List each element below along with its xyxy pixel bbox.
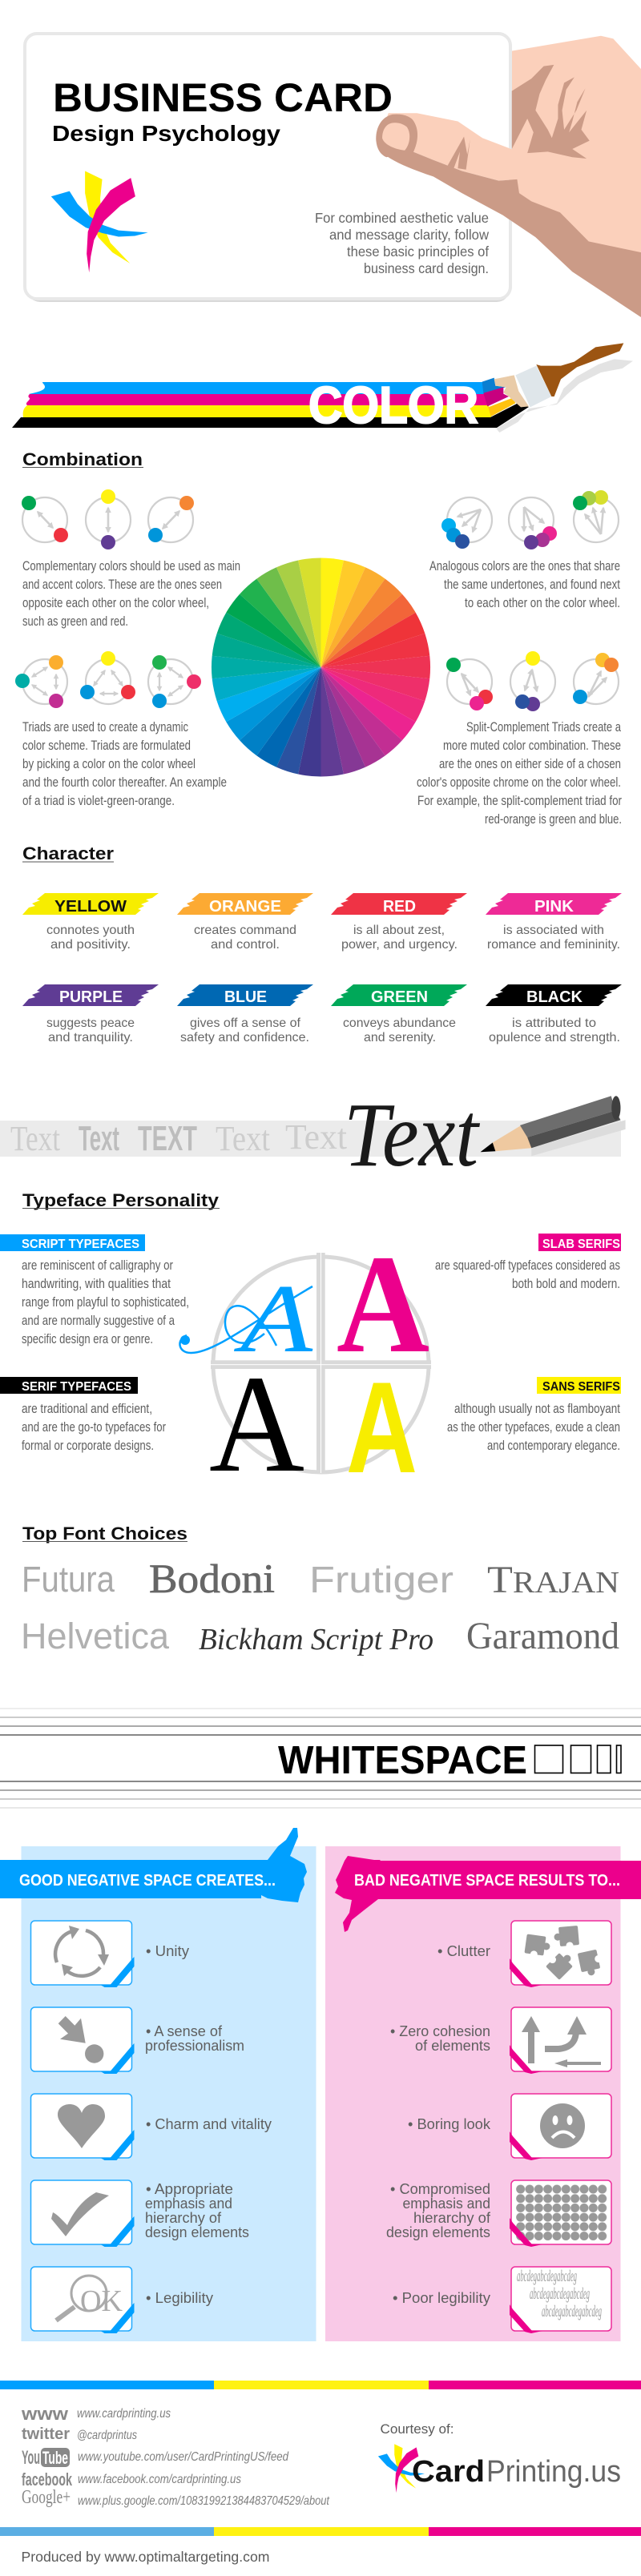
item: professionalism — [30, 2007, 244, 2074]
panel: good negative space — [0, 1828, 316, 2341]
www: www.cardprinting.us — [77, 2407, 171, 2421]
item: zero cohesion: of elements — [415, 2037, 490, 2054]
text: script typefaces — [22, 1258, 189, 1346]
label: slab serifs: SLAB SERIFS — [542, 1238, 620, 1251]
item: zero cohesion — [390, 2007, 611, 2074]
letter: script A: A — [234, 1265, 313, 1373]
google plus: Google+ — [22, 2487, 71, 2508]
twitter: twitter — [22, 2425, 70, 2443]
footer: social links — [21, 2404, 329, 2508]
letter: slab A: A — [337, 1226, 429, 1383]
www: www — [21, 2404, 69, 2424]
label: serif typefaces — [0, 1377, 138, 1394]
label: script typefaces — [0, 1234, 145, 1251]
youtube: www.youtube.com/user/CardPrintingUS/feed — [78, 2450, 289, 2464]
heading: WHITESPACE: WHITESPACE — [278, 1739, 527, 1782]
intro text — [315, 210, 489, 276]
twitter: @cardprintus — [77, 2429, 137, 2442]
letter: sans A: A — [346, 1355, 417, 1500]
logo: CardPrinting.us: Printing.us — [486, 2455, 621, 2489]
panel: blue — [177, 984, 313, 1044]
panel: red: RED — [383, 897, 416, 916]
panel: pink: is associated with — [503, 924, 604, 937]
google plus: www.plus.google.com/108319921384483704529/about — [78, 2494, 329, 2508]
diagram: four typeface quadrants — [179, 1226, 431, 1501]
item: compromised hierarchy: hierarchy of — [413, 2209, 491, 2226]
panel: orange: and control. — [211, 938, 280, 952]
item: clutter — [437, 1921, 611, 1987]
sample words: Text — [285, 1117, 347, 1157]
card — [25, 34, 510, 302]
facebook — [22, 2469, 241, 2489]
panel: yellow: YELLOW — [54, 897, 127, 916]
panel: red: power, and urgency. — [341, 938, 458, 952]
panel: green: conveys abundance — [343, 1016, 456, 1030]
illustration: pencil — [480, 1096, 626, 1156]
illustration: paint brush — [482, 343, 633, 433]
item: compromised hierarchy: • Compromised — [390, 2180, 490, 2197]
sample words — [10, 1117, 347, 1158]
panel: black: opulence and strength. — [489, 1031, 620, 1044]
twitter — [22, 2425, 137, 2443]
item: clutter: • Clutter — [437, 1942, 490, 1959]
diagrams: triad wheels — [15, 651, 201, 708]
panel: purple — [22, 984, 159, 1044]
heading: COLOR: COLOR — [308, 376, 478, 434]
intro text: and message clarity, follow — [329, 227, 489, 243]
facebook: facebook — [22, 2469, 72, 2489]
label: serif typefaces: SERIF TYPEFACES — [22, 1380, 131, 1394]
diagrams: analogous wheels — [441, 490, 619, 549]
panel: orange: creates command — [194, 924, 296, 937]
text: triads: of a triad is violet-green-orange. — [22, 793, 175, 808]
banner with thumbs up: GOOD NEGATIVE SPACE CREATES... — [19, 1872, 276, 1890]
panel: pink: PINK — [534, 897, 574, 916]
panel: font samples: Frutiger — [309, 1559, 454, 1600]
text: slab serifs — [435, 1258, 620, 1291]
panel: yellow: connotes youth — [46, 924, 135, 937]
facebook: www.facebook.com/cardprinting.us — [78, 2473, 241, 2486]
item: legibility: • Legibility — [146, 2289, 214, 2306]
text: analogous — [429, 558, 620, 610]
panel: orange — [177, 893, 313, 952]
item: compromised hierarchy — [386, 2180, 611, 2247]
text: serif typefaces — [22, 1401, 166, 1453]
google plus — [22, 2487, 329, 2508]
item: professionalism: professionalism — [145, 2037, 244, 2054]
item: compromised hierarchy: design elements — [386, 2224, 490, 2240]
item: boring look — [408, 2094, 611, 2160]
icon: CMYK logo — [51, 171, 148, 272]
footer stripe top — [0, 2381, 641, 2389]
item: hierarchy: design elements — [145, 2224, 249, 2240]
label: slab serifs — [538, 1234, 621, 1251]
quadrant ring — [211, 1253, 431, 1473]
label: script typefaces: SCRIPT TYPEFACES — [22, 1238, 139, 1251]
heading: Typeface Personality: Typeface Personality — [22, 1190, 220, 1210]
panel: blue: BLUE — [224, 988, 267, 1006]
diagrams: split-complement wheels — [446, 651, 619, 711]
banner with thumbs up — [0, 1828, 307, 1902]
text: complementary: and accent colors. These are the ones seen — [22, 577, 222, 592]
sample words: Text — [216, 1119, 270, 1158]
panel: font samples: Garamond — [466, 1615, 619, 1657]
panel: purple: suggests peace — [46, 1016, 135, 1030]
text: serif typefaces: are traditional and efficient, — [22, 1401, 152, 1416]
www — [21, 2404, 171, 2424]
panel: green: and serenity. — [364, 1031, 436, 1044]
item: boring look: • Boring look — [408, 2115, 491, 2132]
item: zero cohesion: • Zero cohesion — [390, 2023, 490, 2039]
panel: yellow: and positivity. — [50, 938, 131, 952]
chart: color wheel — [212, 557, 430, 777]
panel: font samples: Helvetica — [21, 1616, 170, 1656]
panel: font samples — [21, 1557, 619, 1657]
panel: red — [331, 893, 467, 952]
item: charm: • Charm and vitality — [146, 2115, 272, 2132]
letter: serif A: A — [209, 1346, 304, 1501]
diagrams: complementary wheels — [22, 489, 194, 549]
youtube — [22, 2447, 289, 2469]
footer stripe bottom — [0, 2527, 641, 2536]
intro text: For combined aesthetic value — [315, 210, 489, 226]
panel: purple: and tranquility. — [48, 1031, 133, 1044]
panel: orange: ORANGE — [209, 897, 281, 916]
panel: black: is attributed to — [512, 1016, 596, 1030]
text: sans serifs — [447, 1401, 620, 1453]
panel: red: is all about zest, — [353, 924, 445, 937]
illustration: thumb and palm over card — [376, 65, 641, 317]
panel: font samples: Bickham Script Pro — [199, 1623, 433, 1656]
panel: pink: romance and femininity. — [487, 938, 620, 952]
panel: bad negative space — [325, 1846, 641, 2341]
sample words: Text — [10, 1119, 60, 1158]
text: complementary: opposite each other on the color wheel, — [22, 595, 209, 610]
illustration: hand back and fingers behind card — [511, 36, 641, 254]
item: professionalism: • A sense of — [146, 2023, 223, 2039]
item: unity — [30, 1921, 190, 1987]
text: complementary — [22, 558, 240, 629]
text: triads: color scheme. Triads are formulated — [22, 738, 191, 753]
item: poor legibility: • Poor legibility — [393, 2289, 491, 2306]
label: sans serifs: SANS SERIFS — [542, 1380, 620, 1394]
subtitle: Design Psychology — [52, 121, 280, 146]
banner with thumbs down — [335, 1856, 641, 1932]
panel: purple: PURPLE — [59, 988, 123, 1006]
panel: yellow — [22, 893, 159, 952]
panel: font samples: TRAJAN — [487, 1559, 619, 1601]
banner strip — [0, 1121, 621, 1157]
text: script typefaces: and are normally suggestive of a — [22, 1313, 175, 1328]
item: hierarchy: hierarchy of — [145, 2209, 222, 2226]
logo: CardPrinting.us: Card — [412, 2455, 485, 2489]
text: triads: Triads are used to create a dynamic — [22, 719, 188, 735]
panel: text banner — [0, 1084, 626, 1185]
text: script typefaces: handwriting, with qualities that — [22, 1276, 171, 1291]
icon: shrinking boxes — [535, 1745, 621, 1773]
text: complementary: such as green and red. — [22, 614, 128, 629]
intro text: business card design. — [364, 260, 489, 276]
panel: black: BLACK — [526, 988, 583, 1006]
panel: green: GREEN — [371, 988, 428, 1006]
panel: font samples: Futura — [22, 1559, 115, 1600]
intro text: these basic principles of — [347, 244, 489, 260]
credit: Produced by www.optimaltargeting.com — [21, 2549, 269, 2565]
text: serif typefaces: and are the go-to typefaces for — [22, 1419, 166, 1435]
item: legibility: OK — [80, 2284, 123, 2318]
courtesy label: Courtesy of: — [380, 2421, 454, 2437]
item: poor legibility — [393, 2267, 611, 2333]
panel: black — [486, 984, 622, 1044]
title: BUSINESS CARD — [53, 75, 393, 120]
heading: Character: Character — [22, 843, 114, 863]
item: hierarchy: • Appropriate — [146, 2180, 233, 2197]
panel: color banner — [12, 343, 633, 434]
text: split-complement — [417, 719, 622, 827]
item: hierarchy: emphasis and — [145, 2195, 232, 2212]
sample words: TEXT — [138, 1119, 197, 1158]
text: triads: and the fourth color thereafter. An example — [22, 775, 227, 790]
text: triads: by picking a color on the color wheel — [22, 756, 196, 771]
text: complementary: Complementary colors should be used as main — [22, 558, 240, 574]
heading: Top Font Choices: Top Font Choices — [22, 1523, 187, 1544]
item: charm — [30, 2094, 272, 2160]
text: triads — [22, 719, 227, 808]
panel: hero business card — [25, 34, 641, 317]
text: serif typefaces: formal or corporate designs. — [22, 1438, 154, 1453]
youtube: You — [22, 2447, 40, 2469]
panel: green — [331, 984, 467, 1044]
logo: CardPrinting.us — [378, 2444, 621, 2493]
heading: Combination: Combination — [22, 449, 143, 469]
text: script typefaces: are reminiscent of calligraphy or — [22, 1258, 173, 1273]
panel: font samples: Bodoni — [149, 1557, 275, 1602]
item: hierarchy — [30, 2180, 249, 2247]
sample words: Text — [79, 1119, 119, 1158]
panel: pink — [486, 893, 622, 952]
item: legibility — [30, 2267, 214, 2333]
text: script typefaces: specific design era or genre. — [22, 1331, 153, 1346]
panel: blue: gives off a sense of — [190, 1016, 301, 1030]
text: script typefaces: range from playful to sophisticated, — [22, 1294, 189, 1310]
panel: blue: safety and confidence. — [180, 1031, 309, 1044]
item: compromised hierarchy: emphasis and — [402, 2195, 490, 2212]
item: unity: • Unity — [146, 1942, 190, 1959]
youtube: Tube — [42, 2448, 68, 2468]
paint stripes — [12, 382, 529, 428]
script word: Text — [344, 1084, 480, 1185]
letter: script A — [179, 1265, 313, 1373]
